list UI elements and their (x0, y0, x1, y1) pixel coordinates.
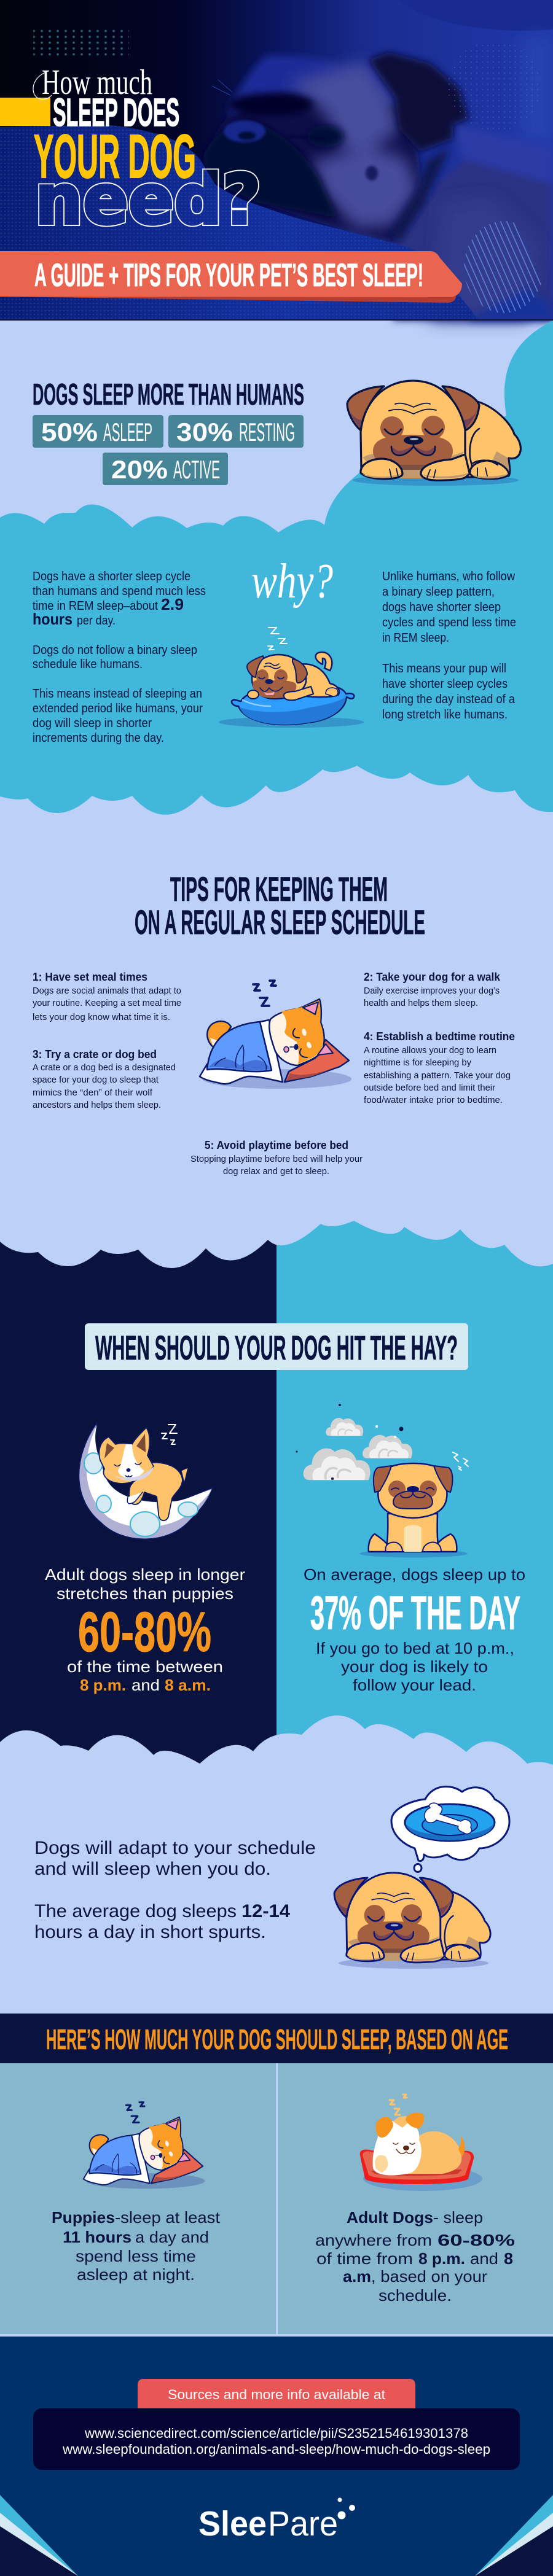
hero striped circle (464, 221, 541, 313)
text: average right (304, 1565, 525, 1694)
text: adult dogs: a.m (343, 2267, 371, 2286)
tip 3: A crate or a dog bed is a designated (33, 1062, 176, 1073)
stat: 30% resting: RESTING (239, 418, 295, 446)
text: adult dogs: schedule. (378, 2286, 452, 2305)
panel: cyan half (276, 1216, 553, 1781)
text: puppies: asleep at night. (77, 2265, 195, 2284)
text: why right column: have shorter sleep cycles (382, 677, 508, 691)
text: adult dogs left: of the time between (67, 1657, 223, 1676)
panel: navy half (0, 1216, 276, 1781)
icon: sleeping dog (347, 381, 520, 486)
text: adult dogs left (45, 1565, 245, 1694)
stat: 50% asleep: 50% (41, 418, 98, 446)
sources links: www.sleepfoundation.org/animals-and-sleep/how-much-do-dogs-sleep (62, 2442, 490, 2457)
hero blanket (0, 125, 479, 321)
text: why right column: cycles and spend less time (382, 616, 516, 629)
logo: SleePare: Slee (198, 2504, 267, 2543)
text: puppies: a day and (135, 2228, 209, 2246)
text: puppies: 11 hours (63, 2228, 131, 2246)
panel: age comparison (0, 2063, 553, 2337)
icon: puppy under blanket (84, 2103, 205, 2189)
heading: tips (135, 870, 425, 941)
text: why left column: per day. (77, 614, 116, 628)
icon: adult dog on bed (360, 2095, 482, 2191)
text: dogs adapt: Dogs will adapt to your schedule (34, 1838, 316, 1858)
text: average right: your dog is likely to (341, 1657, 488, 1676)
icon: dog on pillow (219, 628, 364, 728)
text: adult dogs left: 8 a.m. (165, 1676, 211, 1694)
tip 4: 4: Establish a bedtime routine (364, 1030, 515, 1043)
text: why right column: dogs have shorter sleep (382, 601, 501, 614)
icon: thought bubble with bowl (391, 1786, 509, 1872)
text: why left column: time in REM sleep–about (33, 599, 158, 613)
text: why left column: hours (33, 610, 73, 628)
text: adult dogs: anywhere from (315, 2231, 432, 2249)
hero title: SLEEP DOES (53, 90, 179, 134)
text: average right: follow your lead. (353, 1676, 476, 1694)
tip 2 (364, 971, 501, 1008)
tip 4: outside before bed and limit their (364, 1083, 495, 1093)
cloud: lilac adapt section (0, 1716, 553, 2020)
stat: 50% asleep: ASLEEP (103, 418, 152, 446)
text: adult dogs: 60-80% (437, 2231, 515, 2249)
stat: 30% resting (168, 415, 304, 448)
text: why left column: dog will sleep in shorter (33, 717, 152, 730)
text: puppies: Puppies (52, 2208, 115, 2227)
sources label (138, 2379, 415, 2408)
tip 3 (33, 1048, 176, 1110)
tip 1 (33, 971, 181, 1022)
text: why right column: Unlike humans, who follow (382, 570, 516, 583)
bar: heading based on age (0, 2014, 553, 2063)
text: puppies: -sleep at least (115, 2208, 221, 2227)
tip 1: 1: Have set meal times (33, 971, 147, 983)
text: why left column: This means instead of sleeping an (33, 687, 202, 701)
text: why right column: long stretch like humans. (382, 708, 508, 722)
logo: SleePare: Pare (268, 2504, 338, 2543)
sources label: Sources and more info available at (168, 2387, 385, 2402)
hero title: How much (42, 62, 152, 102)
text: why left column: extended period like humans, your (33, 702, 203, 715)
text: why left column (33, 570, 206, 745)
hero dots top left (33, 28, 129, 58)
text: why left column: increments during the day. (33, 731, 164, 745)
banner: when should your dog hit the hay (85, 1323, 468, 1370)
stat: 20% active: 20% (111, 455, 168, 484)
stat: 50% asleep (33, 415, 163, 448)
text: why right column: a binary sleep pattern, (382, 585, 495, 599)
hero title: YOUR DOG (34, 122, 196, 191)
hero top right circle (390, 0, 553, 31)
heading: dogs sleep more than humans: DOGS SLEEP MORE THAN HUMANS (33, 378, 304, 411)
text: adult dogs left: 8 p.m. (80, 1676, 126, 1694)
text: why right column: This means your pup will (382, 662, 506, 675)
text: why left column: Dogs have a shorter sleep cycle (33, 570, 190, 583)
tip 1: lets your dog know what time it is. (33, 1012, 170, 1022)
stat: 60-80%: 60-80% (78, 1601, 211, 1664)
sources links: www.sciencedirect.com/science/article/pii/S2352154619301378 (84, 2426, 468, 2441)
text: dogs adapt: hours a day in short spurts. (34, 1922, 266, 1942)
text: why left column: than humans and spend much less (33, 585, 206, 598)
cyan cloud: why section bottom (0, 608, 553, 815)
text: why right column: in REM sleep. (382, 631, 449, 645)
sources links (33, 2408, 520, 2470)
text: why right column: during the day instead of a (382, 693, 516, 706)
tip 4: A routine allows your dog to learn (364, 1045, 496, 1056)
tip 5: Stopping playtime before bed will help your (190, 1154, 363, 1164)
text: adult dogs: and (470, 2249, 498, 2268)
hero photo of sleeping pug (203, 52, 553, 321)
logo: SleePare (198, 2498, 355, 2543)
text: average right: On average, dogs sleep up to (304, 1565, 525, 1584)
tip 3: ancestors and helps them sleep. (33, 1100, 161, 1110)
text: adult dogs: , based on your (371, 2267, 487, 2286)
hero subtitle banner (0, 251, 462, 303)
stat: 30% resting: 30% (176, 418, 233, 446)
tip 5 (190, 1139, 363, 1177)
tip 1: your routine. Keeping a set meal time (33, 998, 181, 1008)
text: why left column: Dogs do not follow a binary sleep (33, 644, 197, 657)
icon: sleeping dog dreaming (334, 1873, 490, 1969)
text: adult dogs (315, 2208, 515, 2305)
footer corner right (475, 2495, 553, 2576)
tip 5: dog relax and get to sleep. (223, 1166, 329, 1177)
text: dogs adapt (34, 1838, 316, 1942)
tip 5: 5: Avoid playtime before bed (205, 1139, 348, 1151)
text: adult dogs: - sleep (433, 2208, 483, 2227)
tip 2: 2: Take your dog for a walk (364, 971, 501, 983)
tip 2: Daily exercise improves your dog’s (364, 986, 500, 996)
icon: shiba under blanket (200, 981, 351, 1089)
hero title (0, 69, 259, 227)
text: adult dogs left: stretches than puppies (57, 1584, 233, 1603)
text: adult dogs: 8 (504, 2249, 513, 2268)
heading: why?: why? (251, 555, 333, 609)
text: puppies: spend less time (76, 2247, 196, 2265)
stat: 20% active: ACTIVE (173, 455, 220, 484)
tip 3: 3: Try a crate or dog bed (33, 1048, 157, 1060)
text: adult dogs: of time from (316, 2249, 413, 2268)
text: dogs adapt: The average dog sleeps (34, 1901, 237, 1921)
text: dogs adapt: and will sleep when you do. (34, 1859, 271, 1879)
tip 1: Dogs are social animals that adapt to (33, 986, 181, 996)
tip 4: establishing a pattern. Take your dog (364, 1070, 511, 1081)
text: adult dogs: Adult Dogs (347, 2208, 433, 2227)
icon: corgi on moon (79, 1423, 213, 1539)
panel: hero (0, 0, 553, 321)
tip 3: space for your dog to sleep that (33, 1075, 159, 1085)
text: dogs adapt: 12-14 (241, 1901, 290, 1921)
text: adult dogs left: and (131, 1676, 160, 1694)
text: why left column: 2.9 (161, 595, 184, 613)
text: why right column (382, 570, 516, 722)
tip 2: health and helps them sleep. (364, 998, 478, 1008)
hero dots right (448, 41, 541, 131)
text: why left column: schedule like humans. (33, 658, 143, 671)
tip 4: nighttime is for sleeping by (364, 1057, 471, 1068)
cloud edge above split panels (0, 1197, 553, 1268)
tip 4: food/water intake prior to bedtime. (364, 1095, 503, 1105)
cyan cloud: dog section top (0, 321, 553, 614)
text: adult dogs left: Adult dogs sleep in longer (45, 1565, 245, 1584)
tip 3: mimics the “den” of their wolf (33, 1088, 153, 1098)
stat: 20% active (103, 453, 228, 485)
panel: footer (0, 2337, 553, 2576)
text: puppies (52, 2208, 221, 2284)
text: average right: If you go to bed at 10 p.m., (316, 1639, 514, 1657)
tip 4 (364, 1030, 515, 1105)
icon: pug with clouds (296, 1404, 468, 1557)
footer corner left (0, 2495, 78, 2576)
text: adult dogs: 8 p.m. (418, 2249, 465, 2268)
